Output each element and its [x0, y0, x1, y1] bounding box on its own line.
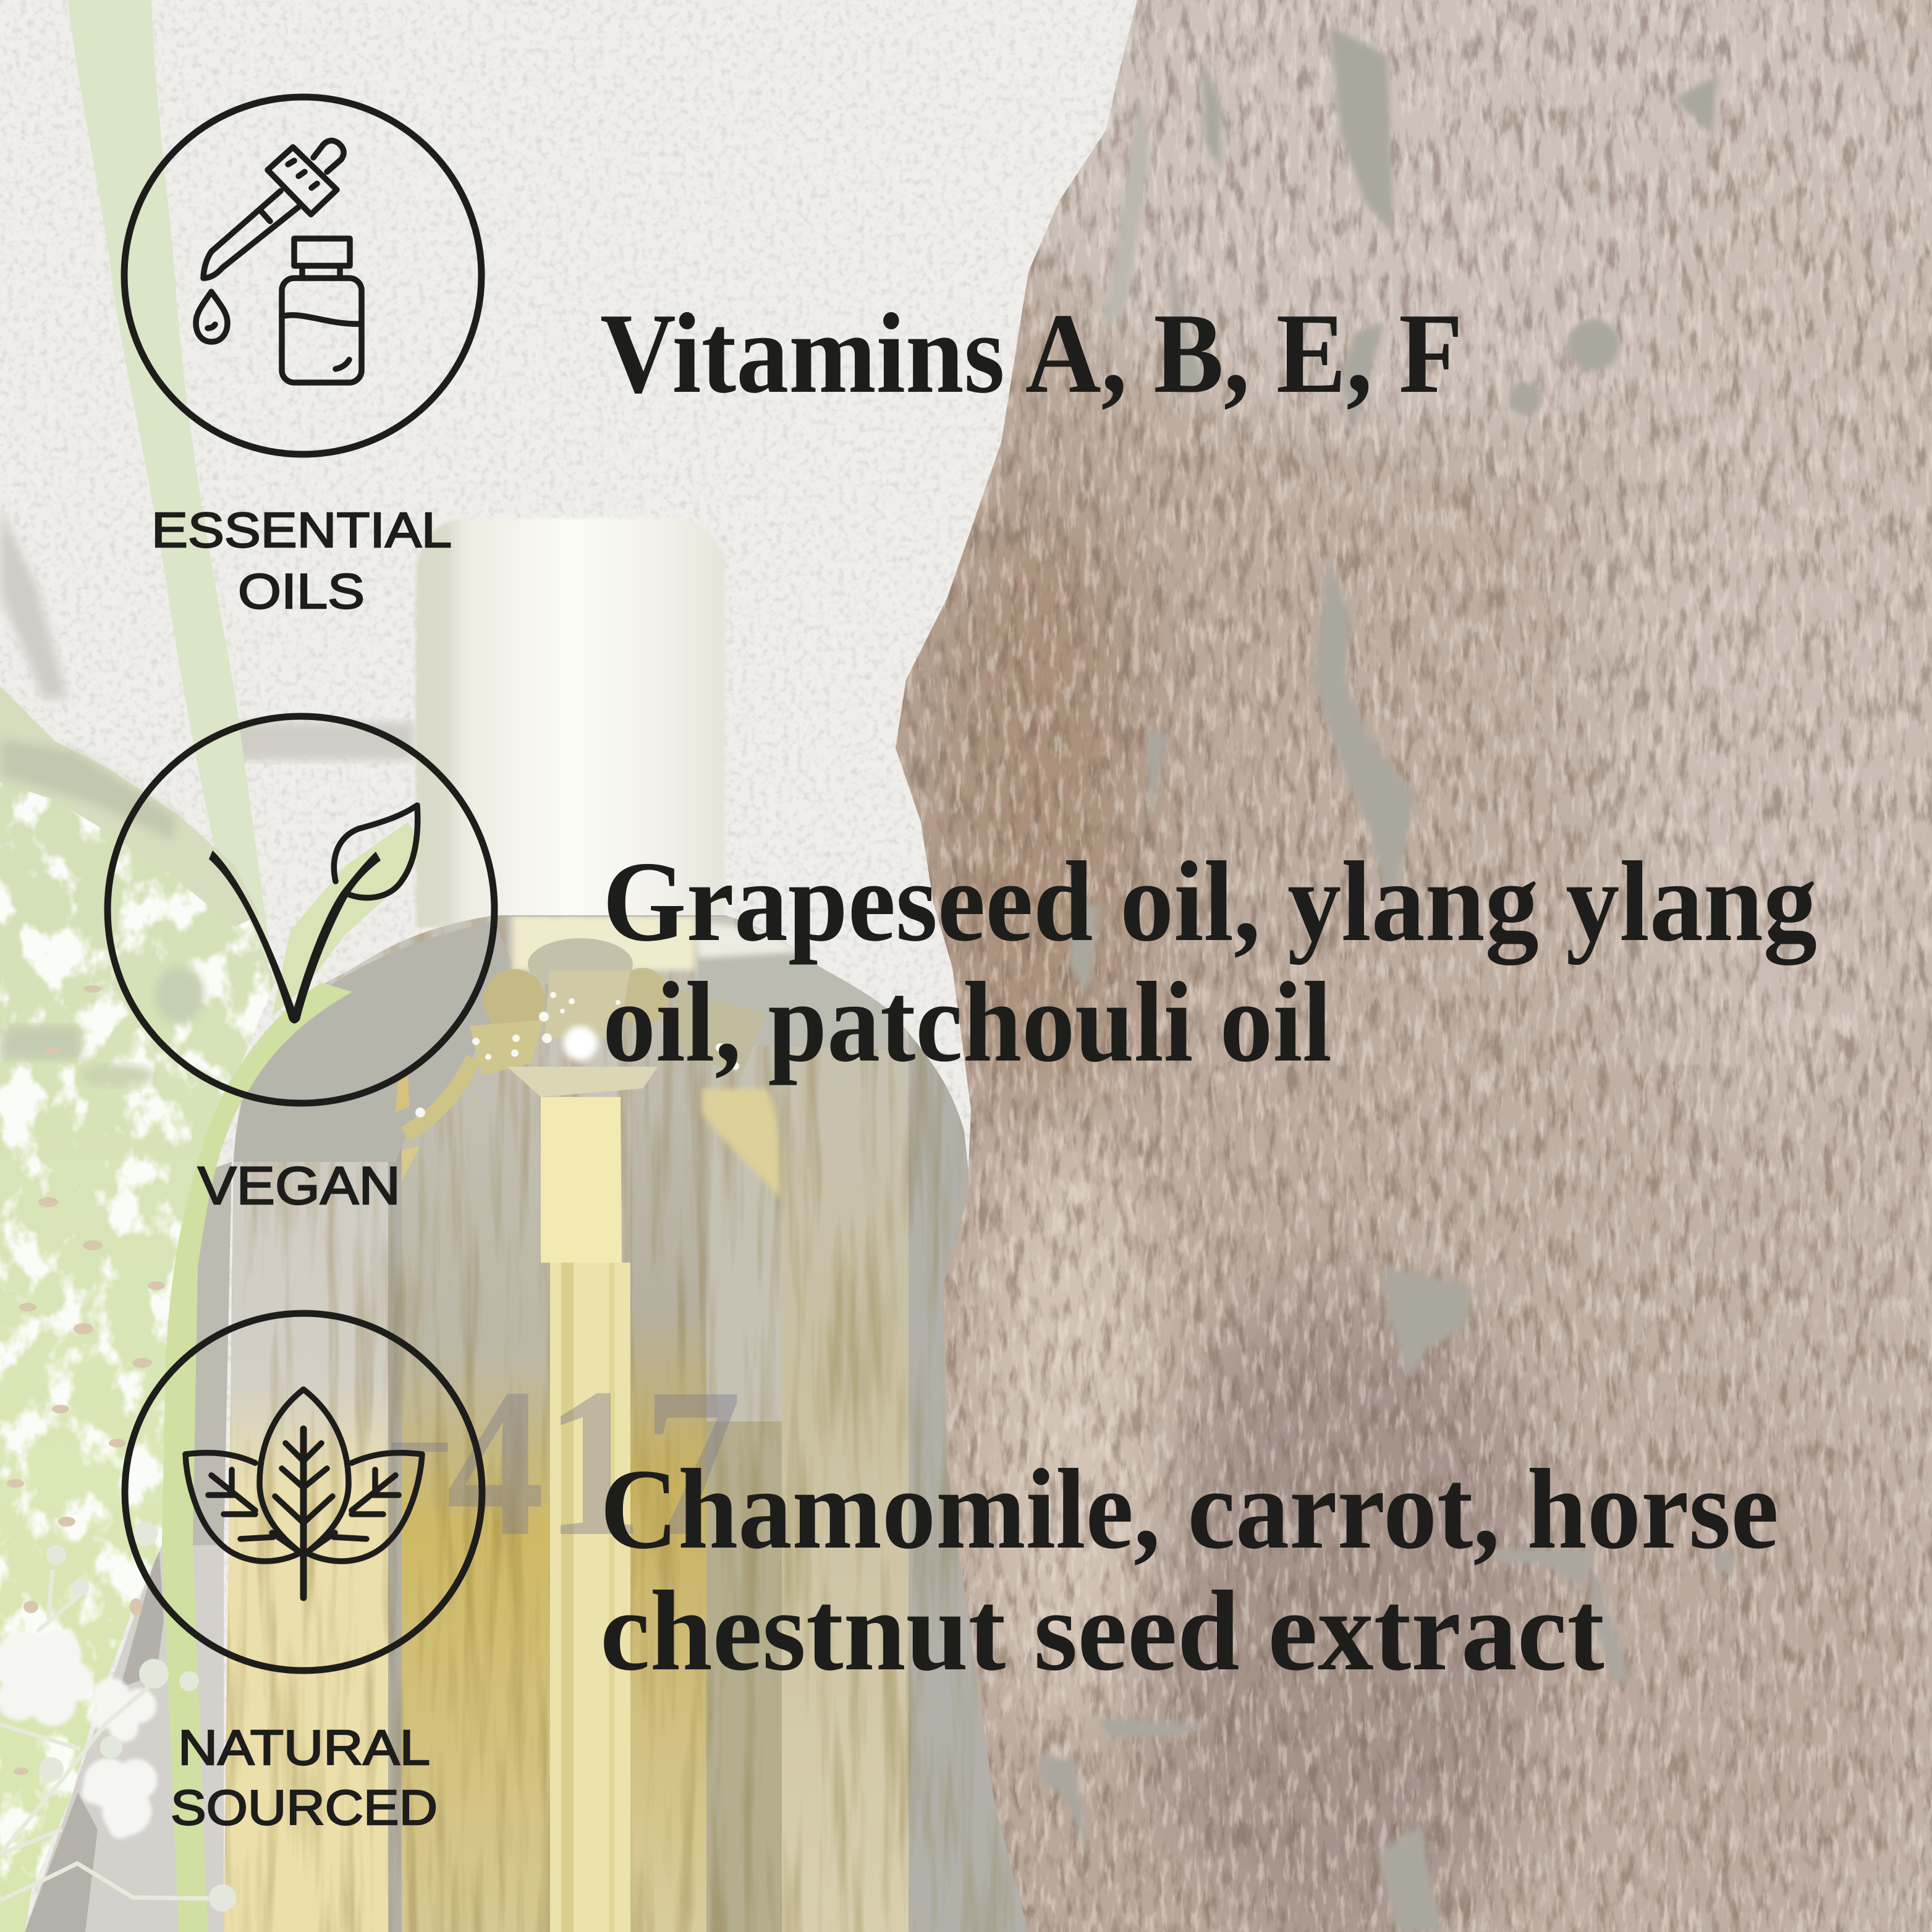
text: oils: oil, patchouli oil	[603, 959, 1332, 1086]
bottle engraving number: 417	[446, 1344, 742, 1580]
collar ornament	[396, 938, 766, 1180]
label: natural sourced	[171, 1720, 438, 1835]
text: extracts: Chamomile, carrot, horse	[600, 1446, 1779, 1573]
plant: small leaf and curved stem	[162, 822, 423, 1932]
label: essential oils	[151, 502, 452, 619]
circle outline	[108, 716, 494, 1103]
icon: three leaves	[185, 1389, 422, 1598]
label: essential oils: ESSENTIAL	[151, 502, 452, 557]
icon: dropper	[203, 140, 344, 278]
circle outline	[125, 1313, 482, 1671]
icon: essential oils badge	[124, 97, 481, 619]
icon: oil bottle	[282, 239, 362, 383]
circle outline	[124, 97, 481, 454]
label: essential oils: OILS	[238, 564, 365, 619]
bottle body	[222, 909, 1058, 1932]
label: natural sourced: SOURCED	[171, 1780, 438, 1835]
text: oils	[603, 838, 1817, 1086]
label: natural sourced: NATURAL	[178, 1720, 430, 1775]
icon: natural sourced badge	[125, 1313, 482, 1835]
icon: oil drop	[196, 292, 227, 342]
collar top	[513, 916, 695, 970]
plant: upper stem	[68, 0, 272, 964]
text: extracts: chestnut seed extract	[600, 1567, 1604, 1695]
oil tube	[541, 1097, 622, 1263]
label: vegan: VEGAN	[198, 1156, 400, 1216]
text: extracts	[600, 1446, 1779, 1695]
flowers	[0, 1522, 236, 1912]
bark cracks	[1038, 25, 1735, 1932]
icon: vegan badge	[108, 716, 494, 1216]
icon: V with leaf	[209, 805, 418, 1023]
plant: diagonal leaf stalk	[0, 686, 260, 927]
shoulder glass	[234, 921, 513, 1162]
text: oils: Grapeseed oil, ylang ylang	[603, 838, 1817, 965]
plant: large leaf	[0, 779, 275, 1932]
bottle cap	[416, 518, 725, 927]
text: vitamins: Vitamins A, B, E, F	[600, 290, 1463, 417]
plant: leaf spines	[7, 985, 165, 1775]
stone shadows	[0, 507, 414, 1932]
